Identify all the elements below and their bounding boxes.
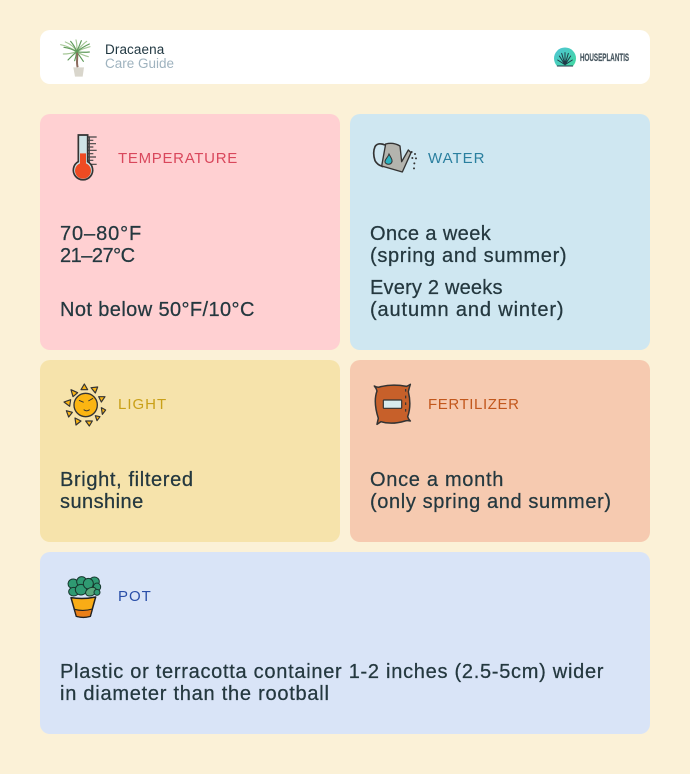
text: pot description: Plastic or terracotta container 1-2 inches (2.5-5cm) wider bbox=[60, 661, 604, 683]
logo wordmark: HOUSEPLANTIS bbox=[580, 52, 629, 64]
text: light requirement: sunshine bbox=[60, 491, 144, 513]
heading: TEMPERATURE bbox=[118, 150, 238, 167]
panel: water bbox=[350, 114, 650, 350]
text: spring and summer: (spring and summer) bbox=[370, 245, 567, 267]
text: minimum: Not below 50°F/10°C bbox=[60, 299, 255, 321]
text: light requirement bbox=[60, 469, 194, 513]
subtitle: Care Guide bbox=[105, 56, 174, 71]
heading: FERTILIZER bbox=[428, 396, 520, 413]
text: range: 70–80°F bbox=[60, 223, 142, 245]
text: spring and summer bbox=[370, 223, 567, 267]
icon: potted plant bbox=[68, 576, 102, 618]
text: pot description: in diameter than the rootball bbox=[60, 683, 330, 705]
text: fertilizer schedule: Once a month bbox=[370, 469, 504, 491]
logo mark bbox=[554, 48, 576, 66]
icon: sun bbox=[63, 383, 106, 427]
panel: fertilizer bbox=[350, 360, 650, 542]
brand title: Dracaena bbox=[105, 42, 164, 57]
icon: dracaena plant bbox=[60, 39, 91, 77]
text: fertilizer schedule: (only spring and summer) bbox=[370, 491, 612, 513]
text: light requirement: Bright, filtered bbox=[60, 469, 194, 491]
header bar bbox=[40, 30, 650, 84]
text: range: 21–27°C bbox=[60, 245, 135, 267]
text: pot description bbox=[60, 661, 604, 705]
text: autumn and winter bbox=[370, 277, 564, 321]
text: autumn and winter: Every 2 weeks bbox=[370, 277, 503, 299]
heading: WATER bbox=[428, 150, 486, 167]
logo: houseplantis bbox=[554, 48, 629, 66]
heading: LIGHT bbox=[118, 396, 167, 413]
panel: light bbox=[40, 360, 340, 542]
panel: temperature bbox=[40, 114, 340, 350]
icon: watering can bbox=[372, 142, 417, 173]
text: spring and summer: Once a week bbox=[370, 223, 491, 245]
icon: thermometer bbox=[72, 134, 97, 181]
text: autumn and winter: (autumn and winter) bbox=[370, 299, 564, 321]
panel: pot bbox=[40, 552, 650, 734]
icon: fertilizer bag bbox=[374, 384, 412, 426]
text: range bbox=[60, 223, 142, 267]
text: fertilizer schedule bbox=[370, 469, 612, 513]
heading: POT bbox=[118, 588, 152, 605]
